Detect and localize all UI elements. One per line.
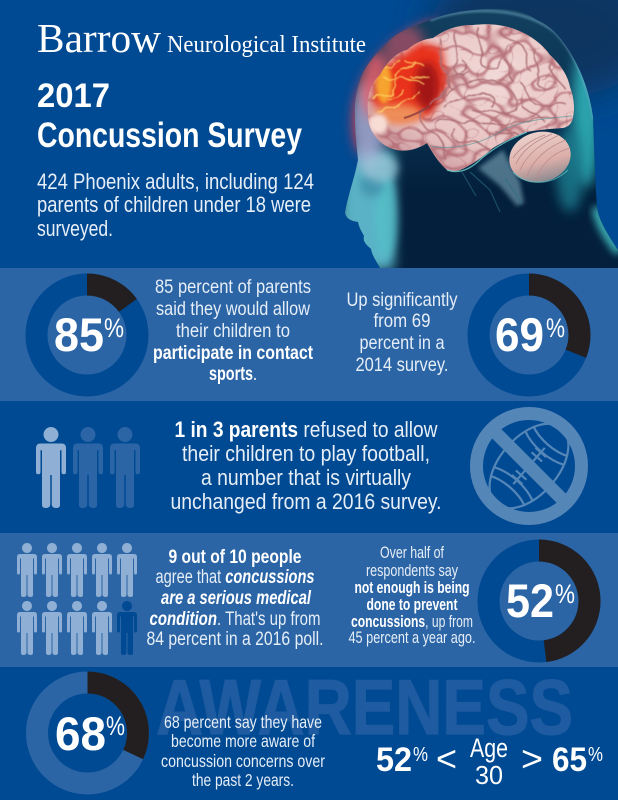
text: 1 in 3 parents: 1 in 3 parents refused to allow <box>174 417 438 442</box>
age comparison: 52% under 30, 65% over 30: 30 <box>475 760 503 790</box>
age comparison: 52% under 30, 65% over 30: % <box>413 744 428 766</box>
text: 9 out of 10 people: agree that concussions <box>156 567 314 588</box>
text: 85 percent of parents: sports. <box>209 363 257 385</box>
text: up significantly <box>346 289 458 376</box>
text: over half of respondents: not enough is being <box>354 579 470 597</box>
text: 68 percent say: 68 percent say they have <box>164 712 322 732</box>
title: Concussion Survey <box>37 116 302 155</box>
logo: Barrow Neurological Institute: Barrow <box>37 15 161 61</box>
header panel background <box>0 0 618 268</box>
text: 68 percent say: become more aware of <box>171 731 315 751</box>
illustration: head and brain with concussion glow <box>340 0 618 270</box>
text: 68 percent say: concussion concerns over <box>161 751 325 771</box>
panel: serious medical condition <box>0 533 618 667</box>
text: up significantly: 2014 survey. <box>356 354 448 376</box>
donut 52% <box>488 550 590 652</box>
intro text: parents of children under 18 were <box>37 192 311 217</box>
age comparison: 52% under 30, 65% over 30: 65 <box>552 741 587 779</box>
text: over half of respondents: Over half of <box>380 544 444 562</box>
text: 9 out of 10 people <box>146 547 324 650</box>
intro text <box>37 169 314 241</box>
text: up significantly: Up significantly <box>346 289 458 311</box>
panel: awareness <box>0 663 618 800</box>
head inner lighting <box>340 11 618 270</box>
text: 9 out of 10 people: are a serious medical <box>161 588 312 609</box>
logo: Barrow Neurological Institute: Neurological Institute <box>167 32 366 58</box>
text: 85 percent of parents: 85 percent of parents <box>155 276 311 298</box>
title: 2017 <box>37 77 110 115</box>
text: 85 percent of parents <box>153 276 313 385</box>
title <box>37 77 302 155</box>
icon: 1 in 3 people <box>36 427 140 508</box>
concussion hot spot and brain folds <box>368 24 574 171</box>
text: 85 percent of parents: participate in contact <box>153 342 313 364</box>
text: 85 percent of parents: said they would allow <box>156 298 311 320</box>
age comparison: 52% under 30, 65% over 30: > <box>521 738 543 779</box>
text: over half of respondents: concussions, up from <box>351 613 473 631</box>
donut 52%: 52 <box>506 574 554 627</box>
text: 1 in 3 parents: a number that is virtually <box>201 465 411 490</box>
age comparison: 52% under 30, 65% over 30: 52 <box>376 741 412 779</box>
donut 68% <box>37 682 138 784</box>
cerebellum <box>509 132 571 183</box>
head silhouette <box>345 9 618 268</box>
icon: 9 out of 10 people <box>17 543 137 655</box>
age comparison: 52% under 30, 65% over 30: Age <box>470 733 508 763</box>
text: 1 in 3 parents <box>170 417 442 514</box>
donut 52%: % <box>555 579 575 609</box>
text: 68 percent say: the past 2 years. <box>192 770 294 790</box>
donut 85% <box>36 284 138 386</box>
text: 85 percent of parents: their children to <box>176 320 290 342</box>
red glow along forehead rim <box>363 30 438 150</box>
logo: Barrow Neurological Institute <box>37 15 366 61</box>
text: up significantly: percent in a <box>360 332 445 354</box>
donut 85%: 85 <box>54 308 104 361</box>
text: 1 in 3 parents: their children to play football, <box>182 441 430 466</box>
age comparison: 52% under 30, 65% over 30: < <box>436 738 457 779</box>
text: over half of respondents: done to prevent <box>366 596 458 614</box>
text: 9 out of 10 people: 84 percent in a 2016 poll. <box>146 629 324 650</box>
donut 69%: 69 <box>495 308 544 361</box>
donut 85%: % <box>104 313 124 343</box>
text: over half of respondents <box>348 544 476 647</box>
text: 1 in 3 parents: unchanged from a 2016 survey. <box>170 489 442 514</box>
brain lower rim light <box>447 132 527 172</box>
intro text: surveyed. <box>37 216 113 241</box>
donut 68%: % <box>106 711 125 741</box>
text: up significantly: from 69 <box>374 310 430 332</box>
brain cerebrum <box>368 24 574 171</box>
age comparison: 52% under 30, 65% over 30 <box>376 733 603 790</box>
donut 68%: 68 <box>55 707 106 760</box>
text: 9 out of 10 people: condition. That's up from <box>150 609 320 630</box>
panel: football refusal <box>0 401 618 533</box>
text: 68 percent say <box>161 712 325 790</box>
text: over half of respondents: respondents say <box>366 562 459 580</box>
intro text: 424 Phoenix adults, including 124 <box>37 169 314 194</box>
panel: contact sports <box>0 268 618 401</box>
brain stem <box>462 150 524 212</box>
donut 69%: % <box>546 313 565 343</box>
text: over half of respondents: 45 percent a year ago. <box>348 629 476 647</box>
donut 69% <box>478 284 580 386</box>
icon: no football <box>474 409 584 523</box>
dark halo around head <box>430 0 618 100</box>
age comparison: 52% under 30, 65% over 30: % <box>588 744 603 766</box>
text: 9 out of 10 people: 9 out of 10 people <box>168 547 302 568</box>
